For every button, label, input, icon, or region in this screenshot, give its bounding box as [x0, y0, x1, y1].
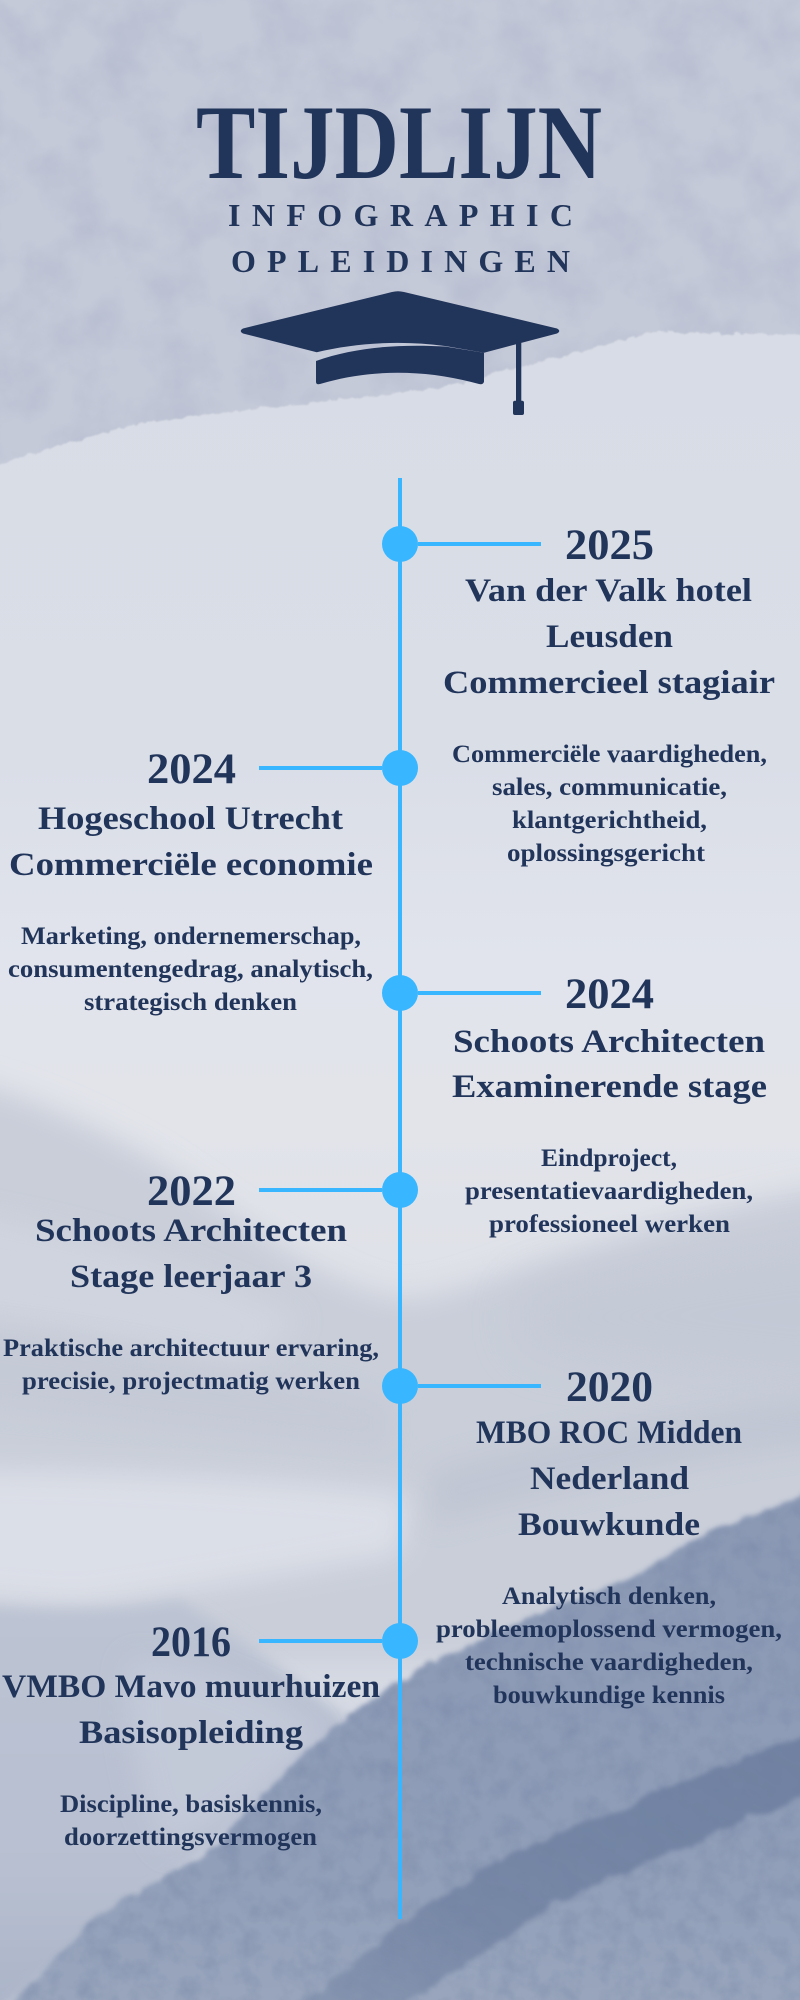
skills: doorzettingsvermogen: [64, 1824, 317, 1851]
skills: Discipline, basiskennis,: [60, 1791, 322, 1818]
skills: Eindproject,: [541, 1145, 677, 1172]
skills: [436, 1583, 782, 1709]
heading: [2, 1669, 380, 1751]
year: 2024: [565, 971, 654, 1018]
skills: consumentengedrag, analytisch,: [8, 956, 373, 983]
heading: Van der Valk hotel: [465, 573, 752, 609]
skills: bouwkundige kennis: [493, 1682, 725, 1709]
heading: [452, 1024, 767, 1105]
skills: precisie, projectmatig werken: [22, 1368, 360, 1395]
skills: strategisch denken: [84, 989, 297, 1016]
skills: professioneel werken: [489, 1211, 730, 1238]
skills: technische vaardigheden,: [465, 1649, 753, 1676]
heading: MBO ROC Midden: [476, 1415, 742, 1451]
year: 2025: [565, 522, 654, 569]
timeline axis: [398, 478, 402, 1919]
title: INFOGRAPHIC: [228, 197, 573, 233]
timeline entry: 2022 Schoots Architecten: [3, 1168, 418, 1395]
heading: Schoots Architecten: [35, 1213, 347, 1249]
background: darker streak: [230, 1715, 800, 2000]
heading: Commercieel stagiair: [443, 665, 775, 701]
heading: [35, 1213, 347, 1295]
skills: [8, 923, 373, 1016]
node and connector: [382, 975, 541, 1011]
heading: Examinerende stage: [452, 1069, 767, 1105]
skills: sales, communicatie,: [492, 774, 727, 801]
year: 2024: [147, 746, 236, 793]
heading: Nederland: [530, 1461, 689, 1497]
heading: [9, 801, 373, 883]
timeline entry: 2020 MBO ROC: [382, 1364, 782, 1709]
heading: Hogeschool Utrecht: [38, 801, 343, 837]
background: dark brush stroke: [0, 1480, 800, 2000]
node and connector: [259, 750, 418, 786]
timeline entry: 2024 Schoots Architecten: [382, 971, 767, 1238]
skills: Commerciële vaardigheden,: [452, 741, 767, 768]
skills: klantgerichtheid,: [512, 807, 707, 834]
heading: Stage leerjaar 3: [70, 1259, 312, 1295]
heading: Schoots Architecten: [453, 1024, 765, 1060]
timeline entry: 2024 Hogeschool Utrecht: [8, 746, 418, 1016]
skills: Praktische architectuur ervaring,: [3, 1335, 379, 1362]
skills: [452, 741, 767, 867]
title: TIJDLIJN: [196, 84, 602, 201]
node and connector: [382, 1368, 541, 1404]
skills: Analytisch denken,: [502, 1583, 716, 1610]
timeline entry: 2016 VMBO: [2, 1619, 418, 1851]
heading: [476, 1415, 742, 1543]
skills: [3, 1335, 379, 1395]
node and connector: [259, 1172, 418, 1208]
year: 2022: [147, 1168, 236, 1215]
skills: Marketing, ondernemerschap,: [21, 923, 361, 950]
year: 2016: [151, 1619, 231, 1666]
skills: [60, 1791, 322, 1851]
heading: Commerciële economie: [9, 847, 373, 883]
background: mottled top wash: [0, 0, 800, 476]
skills: [465, 1145, 753, 1238]
skills: oplossingsgericht: [507, 840, 706, 867]
title: [196, 84, 602, 279]
heading: [443, 573, 775, 701]
skills: probleemoplossend vermogen,: [436, 1616, 782, 1643]
year: 2020: [566, 1364, 653, 1411]
heading: Leusden: [546, 619, 673, 655]
node and connector: [382, 526, 541, 562]
heading: VMBO Mavo muurhuizen: [2, 1669, 380, 1705]
heading: Basisopleiding: [79, 1715, 304, 1751]
skills: presentatievaardigheden,: [465, 1178, 753, 1205]
node and connector: [259, 1623, 418, 1659]
timeline entry: 2025 Van der Valk: [382, 522, 775, 867]
title: OPLEIDINGEN: [231, 243, 570, 279]
heading: Bouwkunde: [518, 1507, 700, 1543]
icon: graduation cap: [241, 291, 559, 415]
